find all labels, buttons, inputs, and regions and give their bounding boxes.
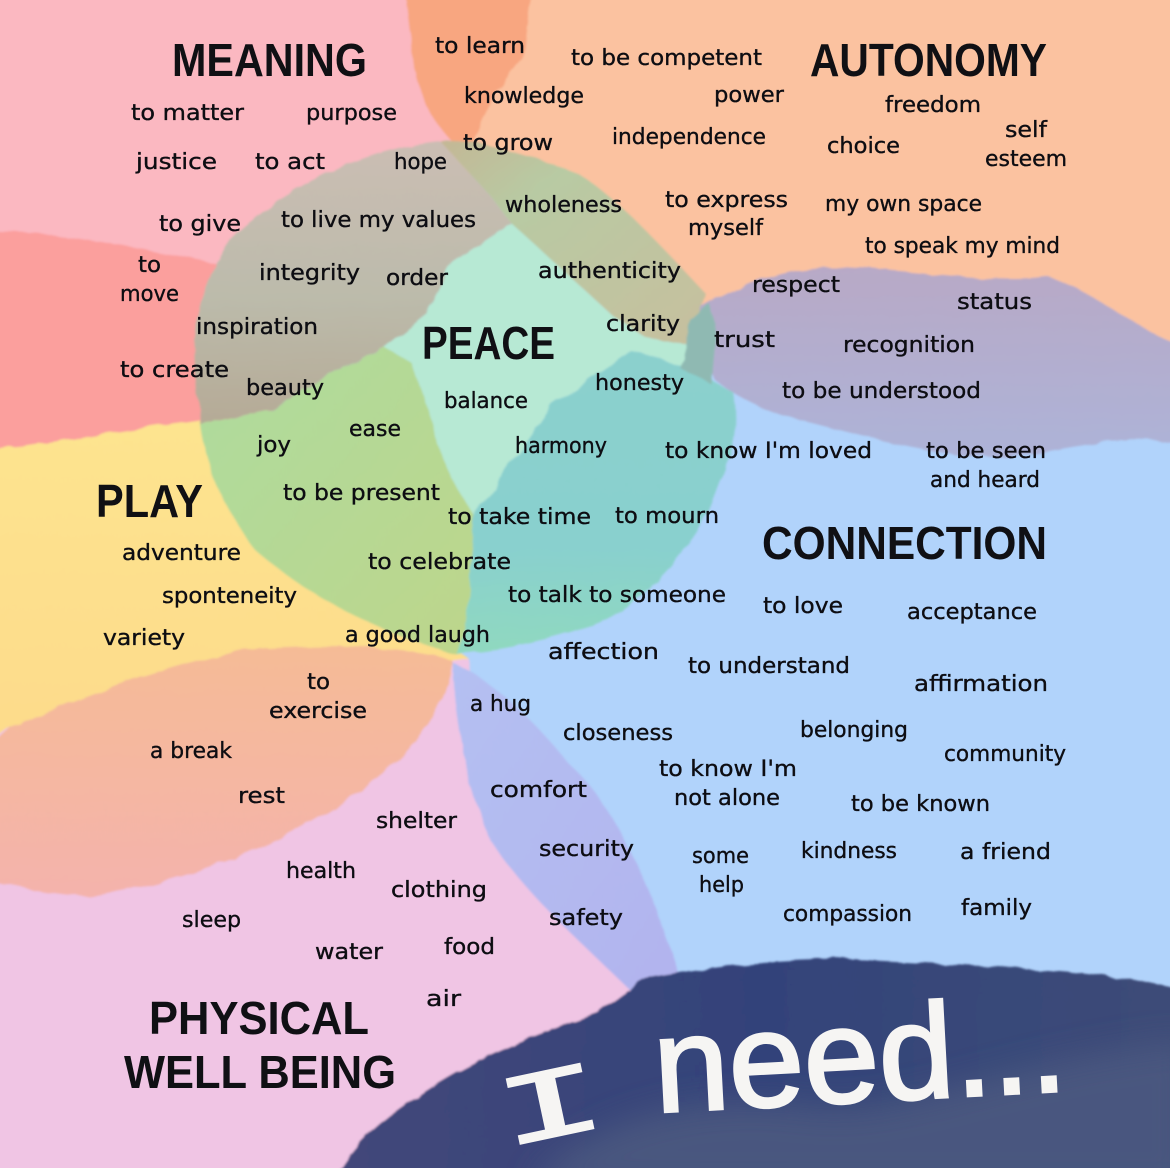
words: connection: to be understood xyxy=(782,379,981,404)
words: autonomy: power xyxy=(714,83,785,108)
center circle: left green xyxy=(200,347,475,654)
words: connection: some xyxy=(692,844,749,869)
words: play: variety xyxy=(103,626,185,651)
words: connection: trust xyxy=(714,328,775,353)
words: meaning: move xyxy=(120,282,179,307)
words: connection: kindness xyxy=(801,839,897,864)
words: connection: compassion xyxy=(783,902,912,927)
words: autonomy: my own space xyxy=(825,192,982,217)
words: play: adventure xyxy=(122,541,241,566)
panel: peace xyxy=(283,312,684,530)
words: connection: to talk to someone xyxy=(508,583,726,608)
heading: peace: PEACE xyxy=(422,317,555,369)
heading: autonomy: AUTONOMY xyxy=(810,34,1047,86)
words: connection: acceptance xyxy=(907,600,1037,625)
panel: physical well being xyxy=(124,670,495,1098)
words: peace: harmony xyxy=(515,434,607,459)
words: peace: to be present xyxy=(283,481,440,506)
words: physical well being: clothing xyxy=(391,878,487,903)
words: autonomy: to speak my mind xyxy=(865,234,1060,259)
heading: play: PLAY xyxy=(96,475,203,527)
panel: autonomy xyxy=(435,34,1067,315)
words: meaning: order xyxy=(386,266,449,291)
words: physical well being xyxy=(150,670,495,1012)
words: physical well being: sleep xyxy=(182,908,241,933)
words: autonomy: to grow xyxy=(463,131,553,156)
words: physical well being: exercise xyxy=(269,699,367,724)
words: meaning: to live my values xyxy=(281,208,476,233)
words: connection: affection xyxy=(548,640,659,665)
words: physical well being: health xyxy=(286,859,356,884)
words: connection: to mourn xyxy=(615,504,719,529)
heading: connection: CONNECTION xyxy=(762,517,1047,569)
words: play: sponteneity xyxy=(162,584,297,609)
heading: physical well being xyxy=(124,992,396,1098)
words: autonomy: wholeness xyxy=(505,193,622,218)
heading: physical well being: WELL BEING xyxy=(124,1046,396,1098)
center circle: upper left xyxy=(195,141,511,424)
words: connection: to be known xyxy=(851,792,990,817)
words: connection: not alone xyxy=(674,786,780,811)
words: meaning: to give xyxy=(159,212,241,237)
center circle: teal xyxy=(456,351,735,654)
title: I need... xyxy=(487,969,1070,1168)
words: physical well being: a break xyxy=(150,739,232,764)
words: meaning: purpose xyxy=(306,101,397,126)
words: autonomy: freedom xyxy=(885,93,981,118)
words: physical well being: air xyxy=(426,987,462,1012)
words: connection: to understand xyxy=(688,654,850,679)
words: meaning: to create xyxy=(120,358,229,383)
heading: physical well being: PHYSICAL xyxy=(149,992,369,1044)
words: connection: belonging xyxy=(800,718,908,743)
center circle: mint xyxy=(384,223,692,516)
words: play: joy xyxy=(256,433,291,458)
words: play xyxy=(103,433,511,651)
words: meaning: to xyxy=(138,253,161,278)
words: peace: balance xyxy=(444,389,528,414)
words: peace xyxy=(283,312,684,530)
words: play: to celebrate xyxy=(368,550,511,575)
words: physical well being: water xyxy=(315,940,384,965)
words: meaning xyxy=(120,101,476,401)
words: connection: and heard xyxy=(930,468,1040,493)
words: autonomy: esteem xyxy=(985,147,1067,172)
words: autonomy: respect xyxy=(752,273,840,298)
words: connection: a friend xyxy=(960,840,1051,865)
words: physical well being: shelter xyxy=(376,809,458,834)
words: autonomy: to learn xyxy=(435,34,525,59)
words: meaning: beauty xyxy=(246,376,324,401)
words: connection: to know I'm xyxy=(659,757,797,782)
words: connection: help xyxy=(699,873,744,898)
words: peace: to take time xyxy=(448,505,591,530)
words: connection: family xyxy=(961,896,1032,921)
words: peace: honesty xyxy=(595,371,684,396)
words: physical well being: rest xyxy=(238,784,285,809)
words: meaning: to matter xyxy=(131,101,245,126)
words: connection: to be seen xyxy=(926,439,1046,464)
words: physical well being: to xyxy=(307,670,330,695)
words: connection xyxy=(470,328,1066,931)
words: connection: a hug xyxy=(470,692,531,717)
words: connection: safety xyxy=(549,906,623,931)
panel: play xyxy=(96,433,511,651)
navy hill xyxy=(330,960,1170,1168)
words: peace: ease xyxy=(349,417,401,442)
words: autonomy: myself xyxy=(688,216,764,241)
words: play: a good laugh xyxy=(345,623,490,648)
words: connection: affirmation xyxy=(914,672,1048,697)
words: peace: clarity xyxy=(606,312,680,337)
words: connection: community xyxy=(944,742,1066,767)
words: connection: to love xyxy=(763,594,843,619)
words: connection: to know I'm loved xyxy=(665,439,872,464)
words: connection: comfort xyxy=(490,778,587,803)
words: autonomy: to express xyxy=(665,188,788,213)
words: autonomy: independence xyxy=(612,125,766,150)
words: connection: recognition xyxy=(843,333,975,358)
words: meaning: inspiration xyxy=(196,315,318,340)
words: autonomy: authenticity xyxy=(538,259,681,284)
words: meaning: hope xyxy=(394,150,447,175)
words: connection: closeness xyxy=(563,721,673,746)
words: meaning: to act xyxy=(255,150,325,175)
words: autonomy: to be competent xyxy=(571,46,762,71)
words: autonomy: knowledge xyxy=(464,84,584,109)
center circle: top xyxy=(440,141,707,345)
words: autonomy: choice xyxy=(827,134,900,159)
words: meaning: justice xyxy=(135,150,217,175)
words: autonomy xyxy=(435,34,1067,315)
words: autonomy: status xyxy=(957,290,1032,315)
heading: meaning: MEANING xyxy=(172,34,367,86)
words: autonomy: self xyxy=(1005,118,1048,143)
title: I need...: need... xyxy=(650,969,1070,1141)
words: physical well being: food xyxy=(444,935,495,960)
panel: connection xyxy=(470,328,1066,931)
panel: meaning xyxy=(120,34,476,401)
words: connection: security xyxy=(539,837,634,862)
words: meaning: integrity xyxy=(259,261,360,286)
